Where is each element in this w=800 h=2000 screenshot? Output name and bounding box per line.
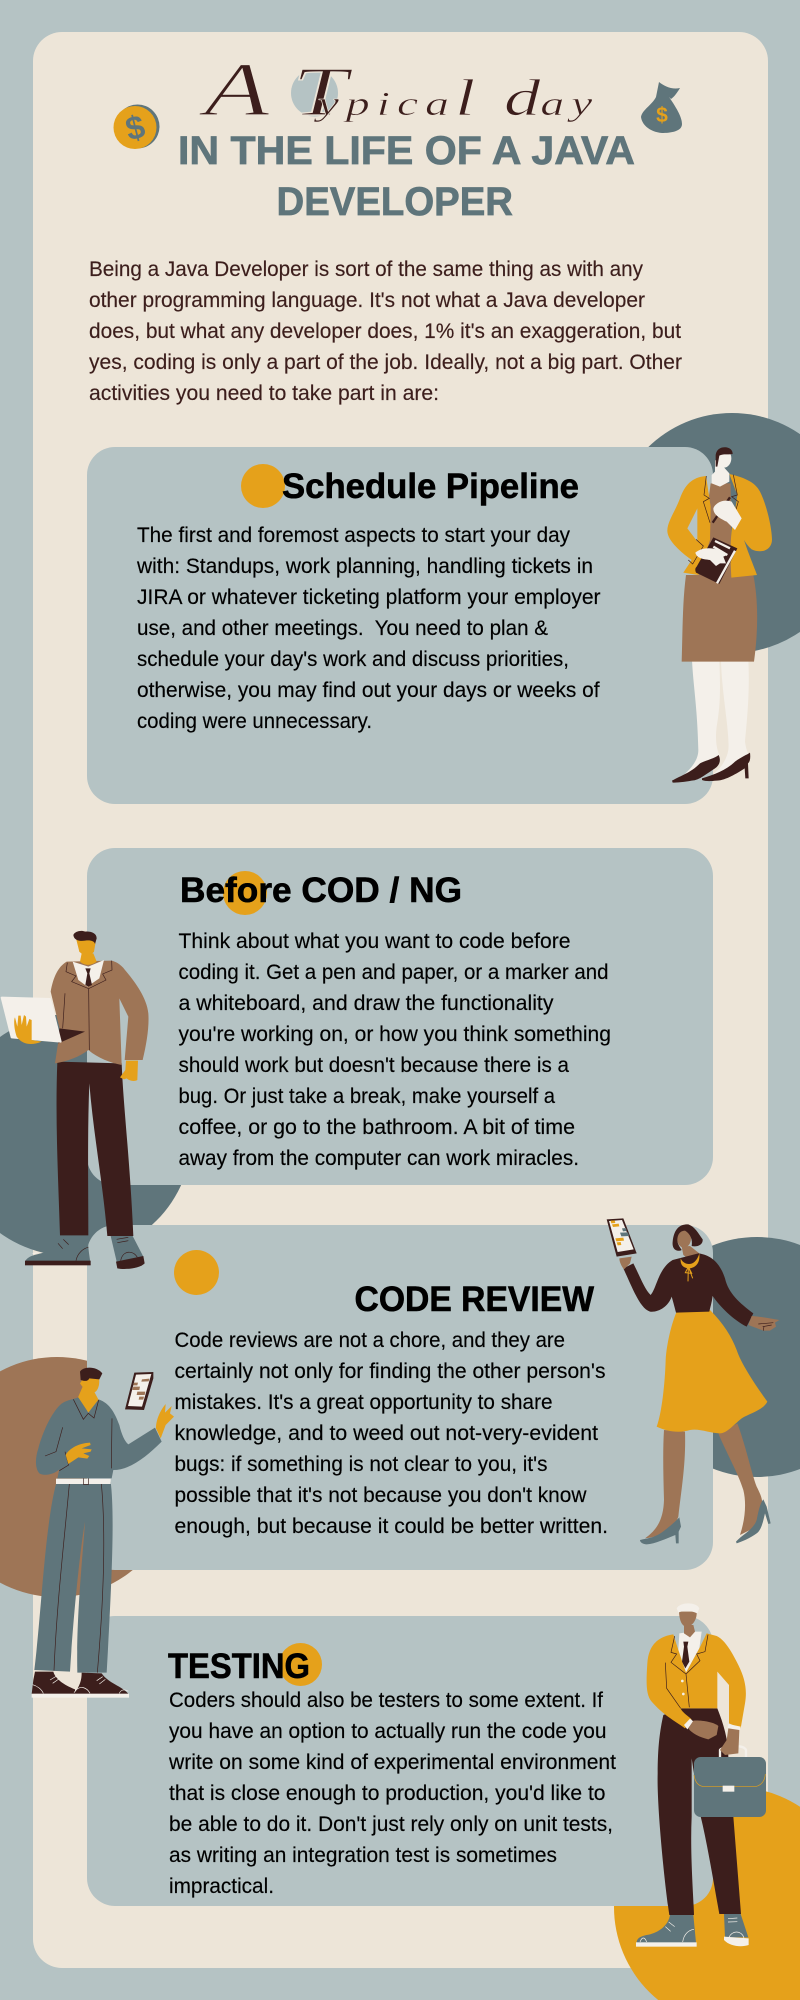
body text: schedule pipeline: coding were unnecessary. (137, 710, 372, 733)
heading: schedule pipeline: Schedule Pipeline (282, 467, 579, 506)
script title: l (455, 69, 493, 127)
intro paragraph: Being a Java Developer is sort of the same thing as with any (89, 258, 643, 281)
intro paragraph (89, 258, 682, 405)
body text: testing: write on some kind of experimental environment (168, 1751, 616, 1774)
icon: money bag (641, 82, 682, 133)
heading accent dot (241, 464, 285, 508)
body text: code review (174, 1329, 608, 1538)
body text: testing: as writing an integration test is sometimes (169, 1844, 557, 1867)
body text: schedule pipeline: otherwise, you may find out your days or weeks of (137, 679, 600, 702)
decor circle: brown behind fourth figure (0, 1357, 177, 1597)
body text: schedule pipeline: schedule your day's work and discuss priorities, (137, 648, 569, 671)
script title: A (197, 48, 294, 131)
body text: schedule pipeline (136, 524, 601, 733)
panel: schedule pipeline (87, 447, 713, 804)
intro paragraph: activities you need to take part in are: (89, 382, 439, 405)
body text: before coding: you're working on, or how you think something (178, 1023, 611, 1046)
intro paragraph: yes, coding is only a part of the job. Ideally, not a big part. Other (89, 351, 682, 374)
heading: testing: TESTING (168, 1647, 310, 1686)
heading accent dot (279, 1643, 322, 1686)
script title: T (293, 53, 354, 131)
figure: woman in amber skirt holding a phone (607, 1218, 779, 1544)
body text: before coding: coding it. Get a pen and paper, or a marker and (178, 961, 608, 984)
heading line 2: DEVELOPER (276, 180, 513, 224)
panel: code review (87, 1225, 713, 1570)
body text: code review: knowledge, and to weed out not-very-evident (174, 1422, 598, 1445)
body text: testing: you have an option to actually run the code you (169, 1720, 606, 1743)
body text: code review: mistakes. It's a great opportunity to share (174, 1391, 552, 1414)
decor circle: amber behind fifth figure (614, 1787, 800, 2000)
panel: testing (87, 1616, 713, 1906)
decor circle: teal behind third figure (637, 1237, 800, 1477)
icon: dollar coin (114, 104, 160, 149)
body text: before coding: away from the computer can work miracles. (178, 1147, 579, 1170)
body text: before coding: should work but doesn't because there is a (178, 1054, 569, 1077)
body text: before coding (178, 930, 611, 1170)
decor circle: teal behind first figure (612, 413, 800, 653)
script title: d (504, 69, 541, 127)
body text: schedule pipeline: use, and other meetings. You need to plan & (137, 617, 548, 640)
title accent blob (291, 70, 338, 116)
heading line 1: IN THE LIFE OF A JAVA (178, 129, 635, 173)
body text: testing: that is close enough to production, you'd like to (169, 1782, 606, 1805)
body text: before coding: bug. Or just take a break, make yourself a (178, 1085, 555, 1108)
body text: testing (168, 1689, 616, 1898)
heading: before coding: Before COD / NG (180, 871, 462, 910)
body text: before coding: coffee, or go to the bathroom. A bit of time (178, 1116, 575, 1139)
body text: code review: possible that it's not because you don't know (174, 1484, 587, 1507)
body text: before coding: a whiteboard, and draw the functionality (178, 992, 554, 1015)
figure: woman in amber blazer holding a notebook (667, 447, 772, 783)
figure: man in teal outfit looking at a phone (32, 1368, 174, 1698)
body text: before coding: Think about what you want to code before (178, 930, 570, 953)
body text: code review: bugs: if something is not clear to you, it's (174, 1453, 548, 1476)
heading: code review: CODE REVIEW (354, 1280, 594, 1319)
decor circle: teal behind second figure (0, 1014, 192, 1256)
body text: code review: Code reviews are not a chore, and they are (174, 1329, 565, 1352)
panel: before coding (87, 848, 713, 1185)
heading accent dot (223, 871, 267, 915)
body text: schedule pipeline: with: Standups, work planning, handling tickets in (136, 555, 593, 578)
figure: older man in amber jacket with a briefcase (636, 1603, 766, 1947)
script title: ypica (313, 85, 456, 122)
body text: testing: impractical. (169, 1875, 274, 1898)
script title: ay (540, 85, 599, 122)
intro paragraph: other programming language. It's not what a Java developer (89, 289, 645, 312)
body text: testing: Coders should also be testers to some extent. If (169, 1689, 603, 1712)
intro paragraph: does, but what any developer does, 1% it's an exaggeration, but (89, 320, 681, 343)
body text: schedule pipeline: JIRA or whatever ticketing platform your employer (137, 586, 601, 609)
body text: code review: enough, but because it could be better written. (174, 1515, 608, 1538)
title block (114, 48, 682, 224)
body text: schedule pipeline: The first and foremost aspects to start your day (137, 524, 570, 547)
body text: testing: be able to do it. Don't just rely only on unit tests, (169, 1813, 613, 1836)
body text: code review: certainly not only for finding the other person's (174, 1360, 606, 1383)
icon: dollar coin: $ (122, 107, 149, 148)
heading accent dot (174, 1250, 219, 1295)
figure: man in brown suit holding a tablet (2, 931, 149, 1269)
icon: money bag: $ (656, 104, 668, 127)
